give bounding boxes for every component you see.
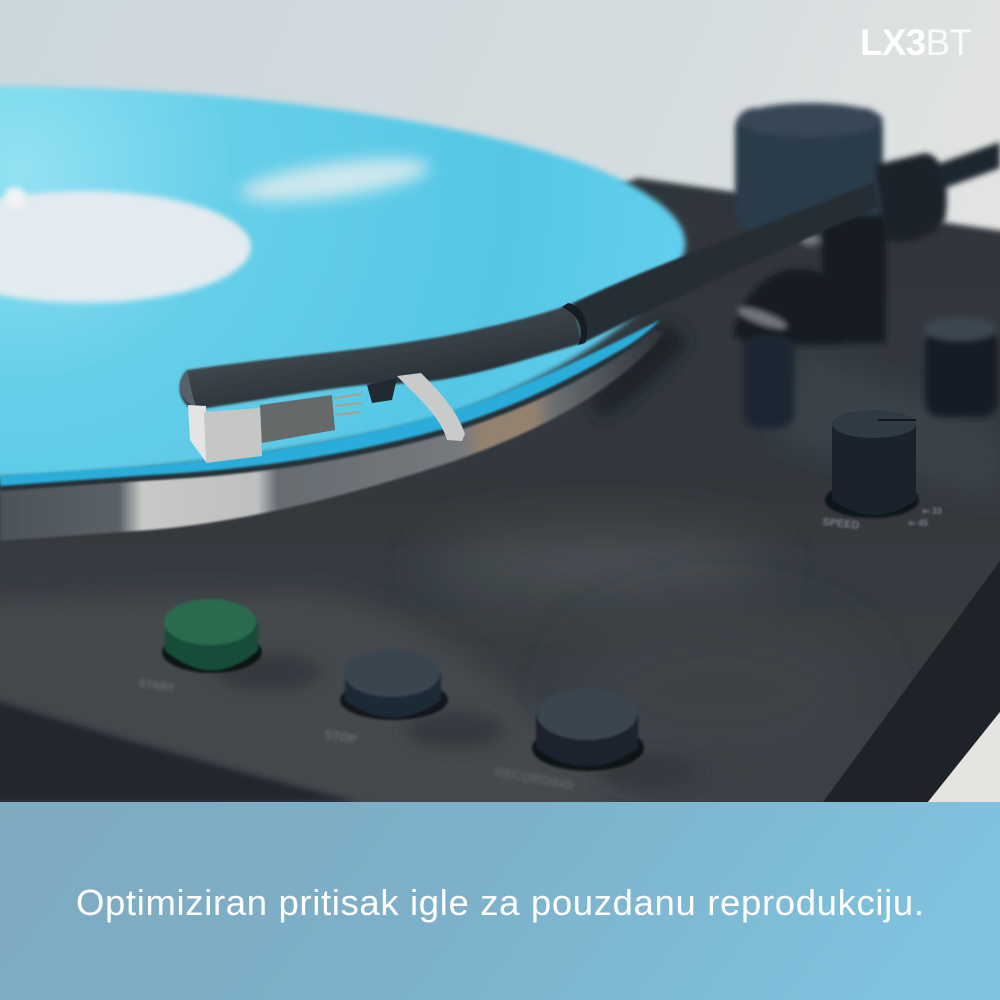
- platter shadow: [590, 320, 690, 420]
- start button: [137, 599, 323, 695]
- caption band: [0, 802, 1000, 1000]
- rear tonearm post: [733, 103, 1000, 345]
- white label: [0, 191, 251, 303]
- arm underside clip: [367, 378, 397, 403]
- finger lift: [397, 373, 465, 441]
- arm front section: [180, 303, 583, 410]
- spindle: [4, 187, 26, 209]
- third button: RECORDING: [493, 764, 574, 793]
- tonearm tube: [180, 182, 878, 410]
- speed value 45: ⇐ 45: [908, 518, 928, 528]
- vinyl record: [0, 86, 685, 491]
- lower-right white corner: [928, 712, 1000, 802]
- speed value 33: ⇐ 33: [922, 506, 942, 516]
- soft highlight on plinth: [430, 535, 770, 595]
- rear knobs: [743, 317, 998, 428]
- arm joint: [562, 303, 587, 345]
- vinyl lip: [0, 320, 660, 486]
- turntable body: [0, 178, 1000, 810]
- stop button: STOP: [323, 727, 358, 747]
- speed knob notch: [878, 419, 916, 421]
- speed labels: SPEED: [822, 516, 860, 532]
- disc glare: [239, 150, 431, 210]
- plinth front dark side right: [823, 561, 1000, 802]
- model logo: LX3BT: [860, 22, 971, 63]
- dark line under lip: [0, 322, 660, 491]
- centre plinth tone: [570, 610, 870, 770]
- stop button: [323, 649, 505, 748]
- left highlight on plinth: [0, 592, 640, 810]
- speed knob: [822, 410, 942, 532]
- platter rim: [0, 330, 665, 541]
- start button: START: [137, 677, 175, 695]
- headshell and cartridge: [188, 394, 362, 463]
- plinth front dark side left: [0, 699, 357, 802]
- plinth rear tone: [780, 350, 1000, 500]
- third button: [493, 688, 700, 793]
- caption text: Optimiziran pritisak igle za pouzdanu reprodukciju.: [76, 882, 925, 923]
- arm end cap: [180, 372, 197, 409]
